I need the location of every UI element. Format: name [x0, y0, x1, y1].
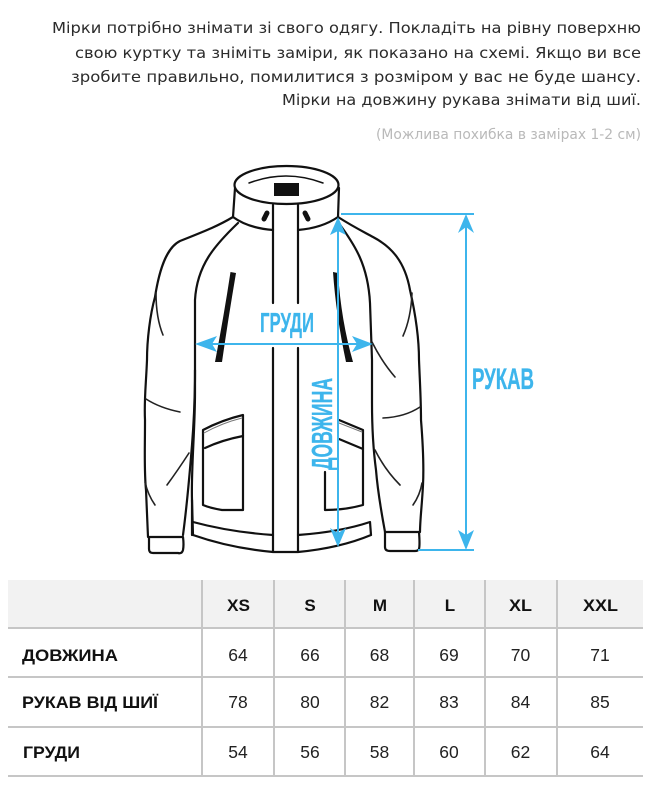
right sleeve [338, 217, 423, 551]
row: sleeve from neck: 78 [228, 692, 248, 712]
row: sleeve from neck: 85 [590, 692, 610, 712]
row: chest [23, 742, 610, 762]
row: length: ДОВЖИНА [22, 647, 118, 665]
sleeve label: РУКАВ [472, 363, 534, 396]
row: chest: ГРУДИ [23, 744, 80, 762]
row: sleeve from neck: 80 [300, 692, 320, 712]
table header background [8, 580, 643, 628]
size header row: XL [509, 596, 532, 615]
right patch pocket [325, 420, 363, 510]
row: chest: 56 [300, 742, 320, 762]
row: sleeve from neck: 83 [439, 692, 459, 712]
sleeve wrinkles [145, 293, 422, 505]
size header row: S [304, 596, 316, 615]
intro text block [52, 19, 641, 109]
row: length: 69 [439, 645, 459, 665]
row: sleeve from neck: 84 [511, 692, 530, 712]
row: chest: 62 [511, 742, 530, 762]
intro text block: Мірки потрібно знімати зі свого одягу. Покладіть на рівну поверхню [52, 19, 641, 37]
row: chest: 58 [370, 742, 389, 762]
table grid [8, 580, 643, 776]
row: chest: 54 [228, 742, 248, 762]
row: length: 64 [228, 645, 248, 665]
row: length: 68 [370, 645, 389, 665]
size header row: L [445, 596, 455, 615]
size header row [227, 596, 618, 615]
measurement error note: (Можлива похибка в замірах 1-2 см) [376, 127, 641, 143]
collar brand label [274, 183, 299, 196]
zip pockets [215, 272, 353, 362]
collar buttons [264, 213, 308, 219]
size header row: XS [227, 596, 250, 615]
collar [233, 166, 339, 230]
sleeve measurement arrow [341, 214, 474, 550]
row: length: 71 [590, 645, 610, 665]
jacket outline illustration [145, 166, 423, 553]
row: sleeve from neck: РУКАВ ВІД ШИЇ [22, 694, 158, 712]
row: length: 70 [511, 645, 530, 665]
row: sleeve from neck [22, 692, 610, 712]
chest label: ГРУДИ [260, 307, 314, 338]
hem [192, 500, 371, 552]
left sleeve [145, 217, 238, 553]
length measurement arrow [330, 217, 346, 547]
left patch pocket [203, 415, 243, 510]
intro text block: свою куртку та зніміть заміри, як показано на схемі. Якщо ви все [75, 44, 641, 62]
intro text block: зробите правильно, помилитися з розміром у вас не буде шансу. [71, 68, 641, 86]
row: sleeve from neck: 82 [370, 692, 389, 712]
row: length [22, 645, 610, 665]
size table [8, 580, 643, 776]
size header row: M [373, 596, 387, 615]
row: length: 66 [300, 645, 320, 665]
chest measurement arrow [195, 336, 373, 352]
size header row: XXL [583, 596, 618, 615]
row: chest: 60 [439, 742, 459, 762]
intro text block: Мірки на довжину рукава знімати від шиї. [282, 91, 641, 109]
length label: ДОВЖИНА [307, 378, 339, 470]
row: chest: 64 [590, 742, 610, 762]
front placket [273, 205, 298, 551]
